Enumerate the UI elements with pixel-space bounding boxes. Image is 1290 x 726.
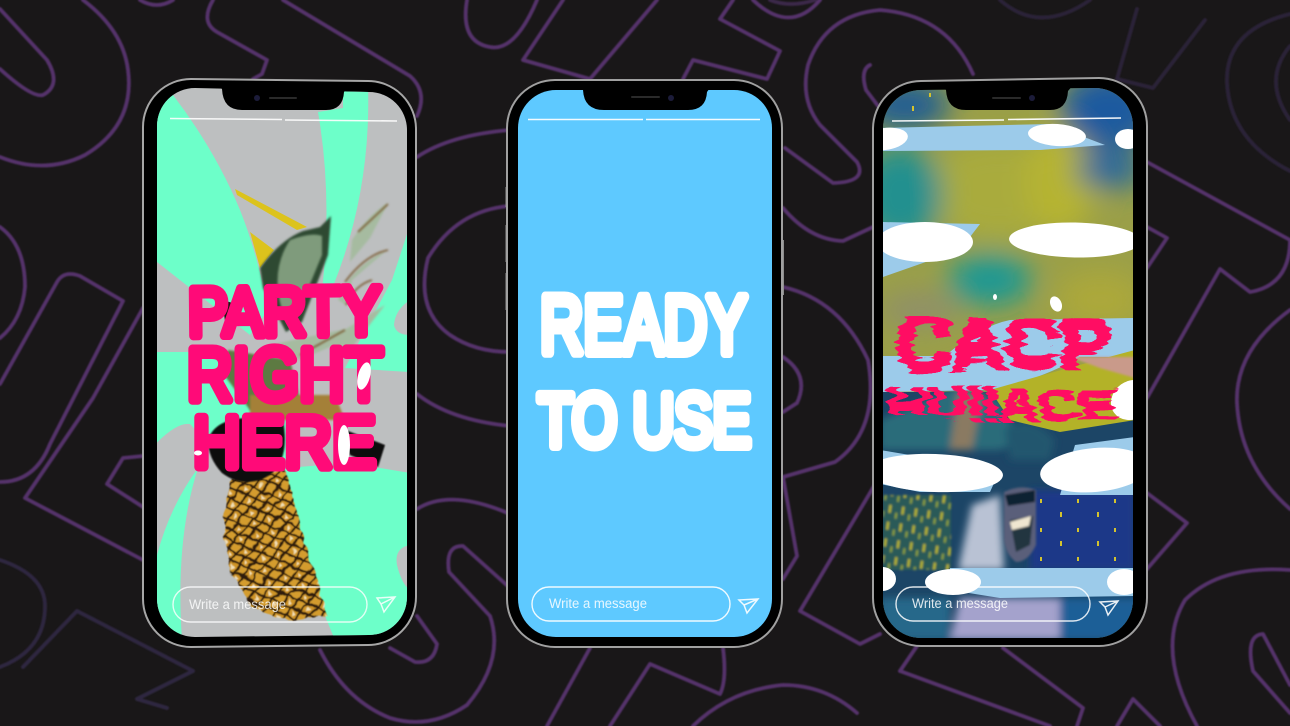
phone 1 message field: Write a message: [189, 597, 286, 612]
headline: PARTY: [188, 273, 381, 351]
phone 3 message field: [896, 587, 1090, 621]
white paint dabs: [194, 361, 373, 465]
phone 1 send icon: [377, 597, 395, 612]
phone 2 camera and speaker: [631, 95, 674, 101]
screaming face: [1004, 487, 1036, 562]
paint cloud colours: [883, 88, 1133, 337]
yellow swoosh: [990, 350, 1135, 432]
phone 3 story screen: [883, 88, 1133, 638]
phone 2 progress bars: [528, 118, 760, 120]
headline: RIGHT: [187, 333, 383, 416]
pineapple body: [224, 466, 328, 620]
white paint dabs: [883, 124, 1133, 595]
phone 3 camera and speaker: [992, 95, 1035, 101]
phone 2 frame: [507, 80, 782, 647]
glitched headline: CACP: [896, 304, 1110, 384]
phone 2 story screen: [518, 90, 772, 637]
phone 2 headline: READY: [540, 280, 747, 371]
phone 1: party right here: [143, 79, 416, 647]
phone 3: glitch party: [858, 70, 1161, 646]
phone 2 headline: [538, 280, 751, 462]
light blue bands: [880, 124, 1135, 598]
phone 1 message field: [173, 587, 367, 622]
phone 1 progress bars: [170, 118, 397, 121]
pineapple upper: [250, 395, 345, 420]
phone 2: ready to use: [506, 80, 784, 647]
phone 3 notch: [941, 84, 1074, 110]
pineapple leaves: [260, 216, 331, 332]
glitched headline: HUIIACE: [888, 378, 1116, 430]
phone 3 send icon: [1100, 601, 1118, 615]
grey lumps: [394, 302, 407, 335]
phone 2 side buttons: [506, 187, 784, 310]
crowd area: [880, 392, 1135, 642]
phone 3 frame: [873, 78, 1147, 646]
phone 2 message field: [532, 587, 730, 621]
phone 2 message field: Write a message: [549, 596, 647, 611]
phone 1 notch: [216, 84, 350, 110]
mint wedges: [150, 85, 410, 640]
phone 2 headline: TO USE: [538, 379, 751, 462]
phone 1 story screen: [150, 85, 415, 645]
phone 3 message field: Write a message: [912, 596, 1008, 611]
phone 3 progress bars: [892, 118, 1121, 121]
glitched headline: [884, 316, 1120, 423]
headline: HERE: [193, 403, 376, 483]
phone 2 notch: [578, 85, 712, 110]
sunglasses: [208, 418, 385, 482]
headline: [187, 273, 383, 483]
yellow streaks: [235, 189, 307, 268]
phone 2 send icon: [739, 599, 758, 613]
phone 1 camera and speaker: [254, 95, 297, 101]
phone 1 frame: [143, 79, 416, 647]
